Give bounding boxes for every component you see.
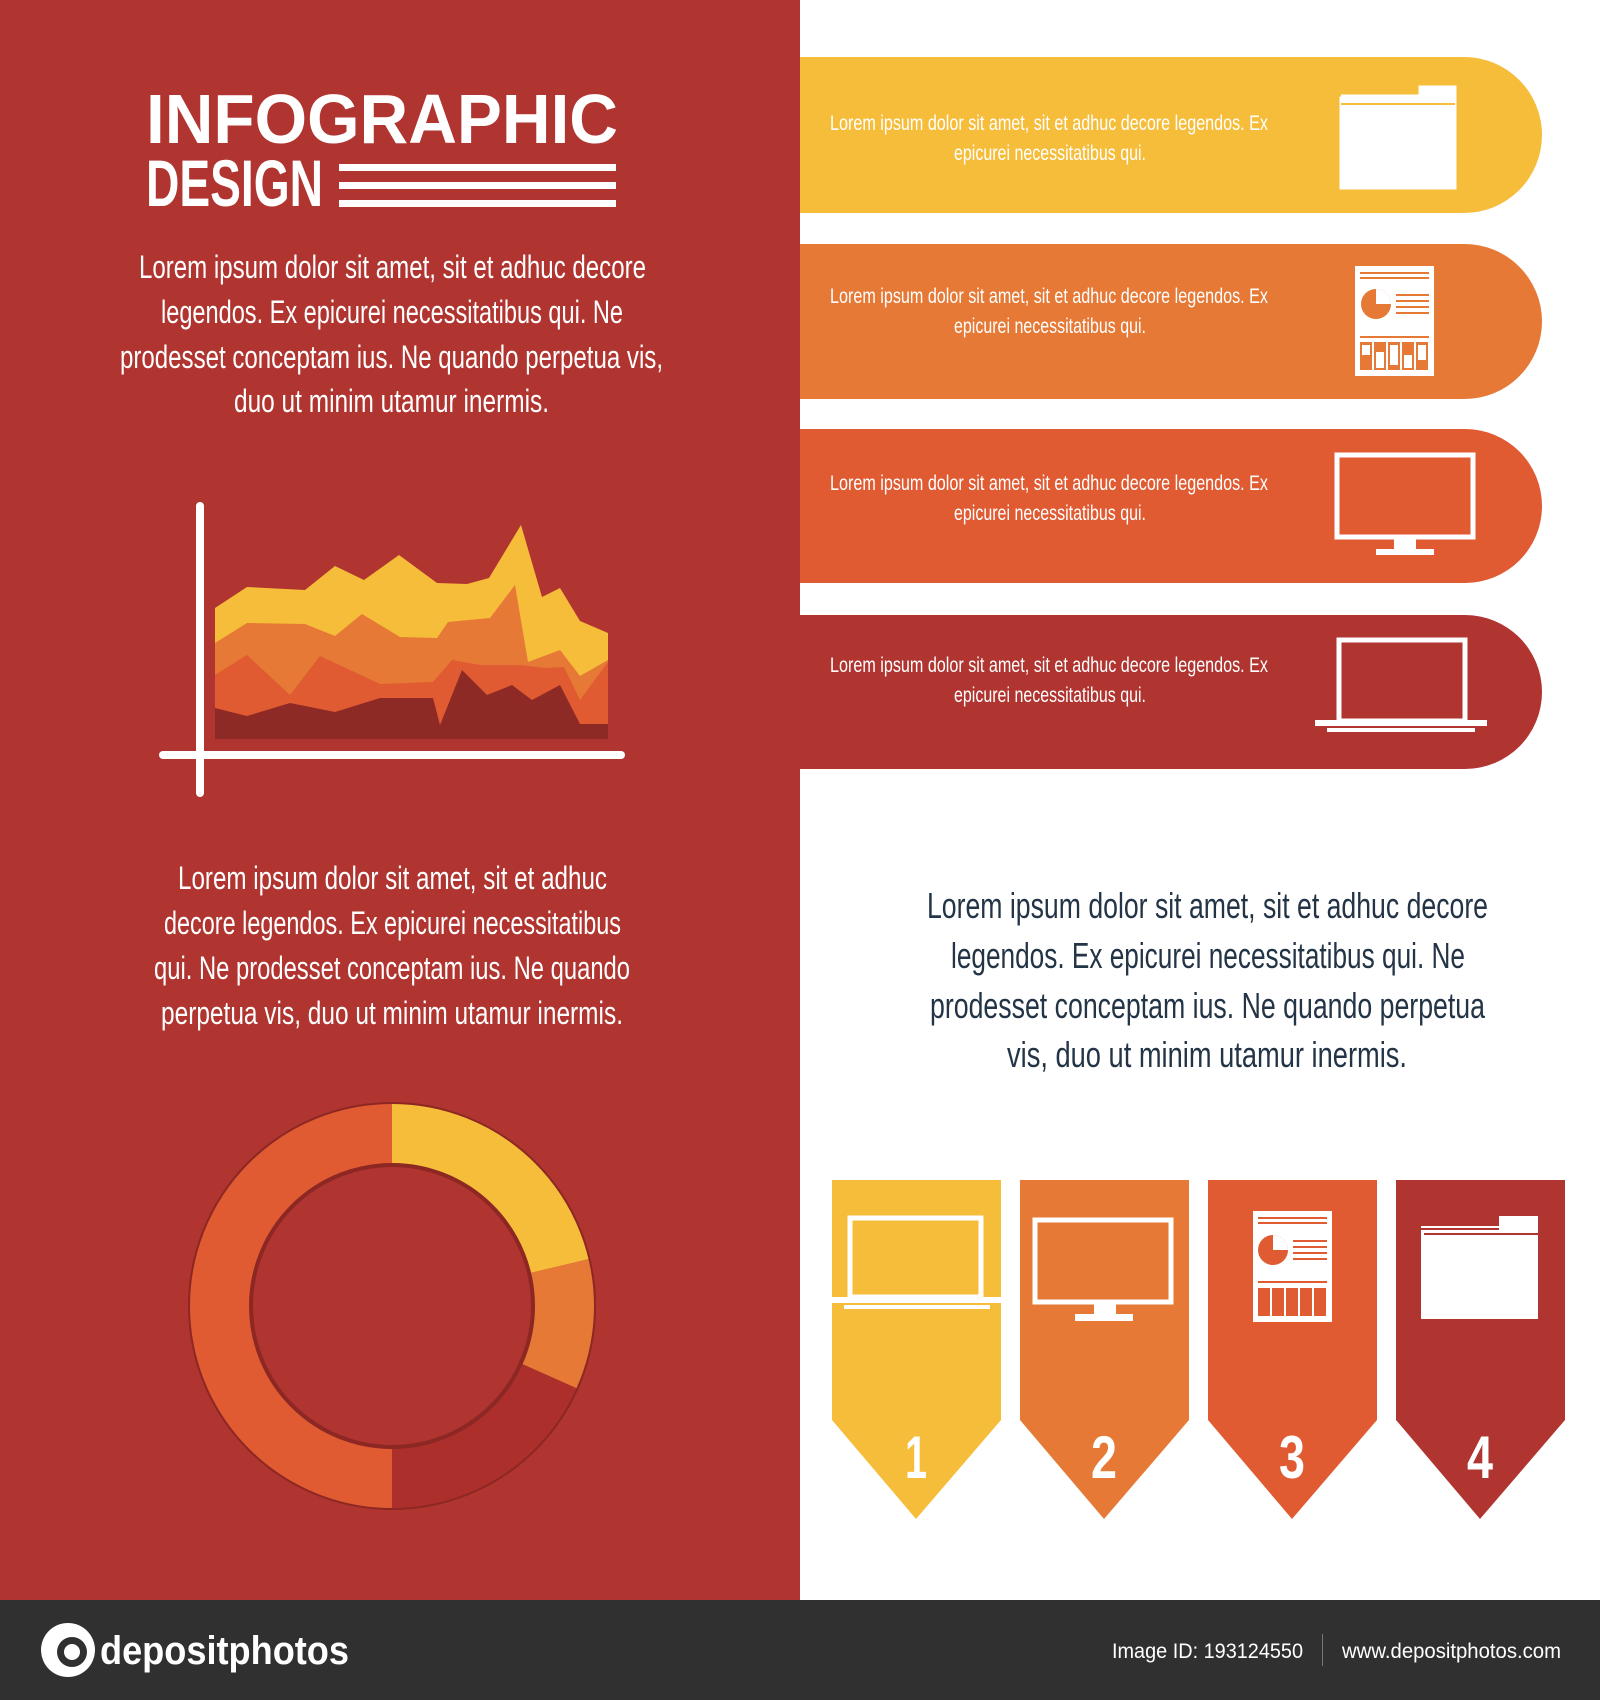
arrow 1: laptop: 1 — [905, 1424, 927, 1491]
title: DESIGN — [146, 146, 323, 220]
banner 4: laptop: Lorem ipsum dolor sit amet, sit et adhuc decore legendos. Ex — [830, 654, 1268, 677]
text block: intro: prodesset conceptam ius. Ne quando perpetua vis, — [120, 339, 663, 375]
left red panel — [0, 0, 800, 1600]
icon: folder — [1341, 87, 1455, 188]
footer logo — [41, 1623, 349, 1677]
donut chart — [189, 1103, 595, 1509]
banner 1: folder: epicurei necessitatibus qui. — [954, 142, 1146, 165]
arrow 3: document — [1208, 1180, 1377, 1519]
banner 4: laptop: epicurei necessitatibus qui. — [954, 684, 1146, 707]
area chart — [159, 502, 625, 797]
title: INFOGRAPHIC — [146, 80, 618, 158]
arrow 2: monitor — [1020, 1180, 1189, 1519]
footer image id: Image ID: 193124550 — [1112, 1640, 1303, 1663]
banner 2: document: Lorem ipsum dolor sit amet, sit et adhuc decore legendos. Ex — [830, 285, 1268, 308]
text block: right description: vis, duo ut minim utamur inermis. — [1007, 1034, 1407, 1075]
icon: laptop — [1315, 640, 1487, 732]
arrow 3: document: 3 — [1279, 1424, 1305, 1491]
text block: intro: legendos. Ex epicurei necessitatibus qui. Ne — [161, 294, 623, 330]
banner 1: folder — [800, 57, 1542, 213]
banner 2: document — [800, 244, 1542, 399]
text block: right description — [927, 885, 1488, 1075]
banner 1: folder: Lorem ipsum dolor sit amet, sit et adhuc decore legendos. Ex — [830, 112, 1268, 135]
banner 4: laptop — [800, 615, 1542, 769]
text block: intro: duo ut minim utamur inermis. — [234, 383, 549, 419]
text block: chart description: Lorem ipsum dolor sit amet, sit et adhuc — [178, 860, 607, 896]
footer url: www.depositphotos.com — [1341, 1640, 1561, 1663]
banner 3: monitor — [800, 429, 1542, 583]
text block: intro: Lorem ipsum dolor sit amet, sit et adhuc decore — [139, 249, 646, 285]
icon: monitor — [1337, 455, 1473, 555]
footer logo: depositphotos — [100, 1629, 349, 1673]
arrow 4: folder: 4 — [1467, 1424, 1493, 1491]
footer bar — [0, 1600, 1600, 1700]
arrow 2: monitor: 2 — [1091, 1424, 1117, 1491]
text block: chart description: decore legendos. Ex epicurei necessitatibus — [164, 905, 621, 941]
right white panel — [800, 0, 1600, 1600]
icon: report document — [1355, 266, 1434, 376]
arrow 4: folder — [1396, 1180, 1565, 1519]
banner 3: monitor: Lorem ipsum dolor sit amet, sit et adhuc decore legendos. Ex — [830, 472, 1268, 495]
title — [146, 80, 618, 220]
arrow 1: laptop — [832, 1180, 1001, 1519]
text block: chart description: perpetua vis, duo ut minim utamur inermis. — [161, 995, 623, 1031]
text block: chart description — [154, 860, 630, 1031]
banner 2: document: epicurei necessitatibus qui. — [954, 315, 1146, 338]
text block: intro — [120, 249, 663, 419]
banner 3: monitor: epicurei necessitatibus qui. — [954, 502, 1146, 525]
text block: chart description: qui. Ne prodesset conceptam ius. Ne quando — [154, 950, 630, 986]
